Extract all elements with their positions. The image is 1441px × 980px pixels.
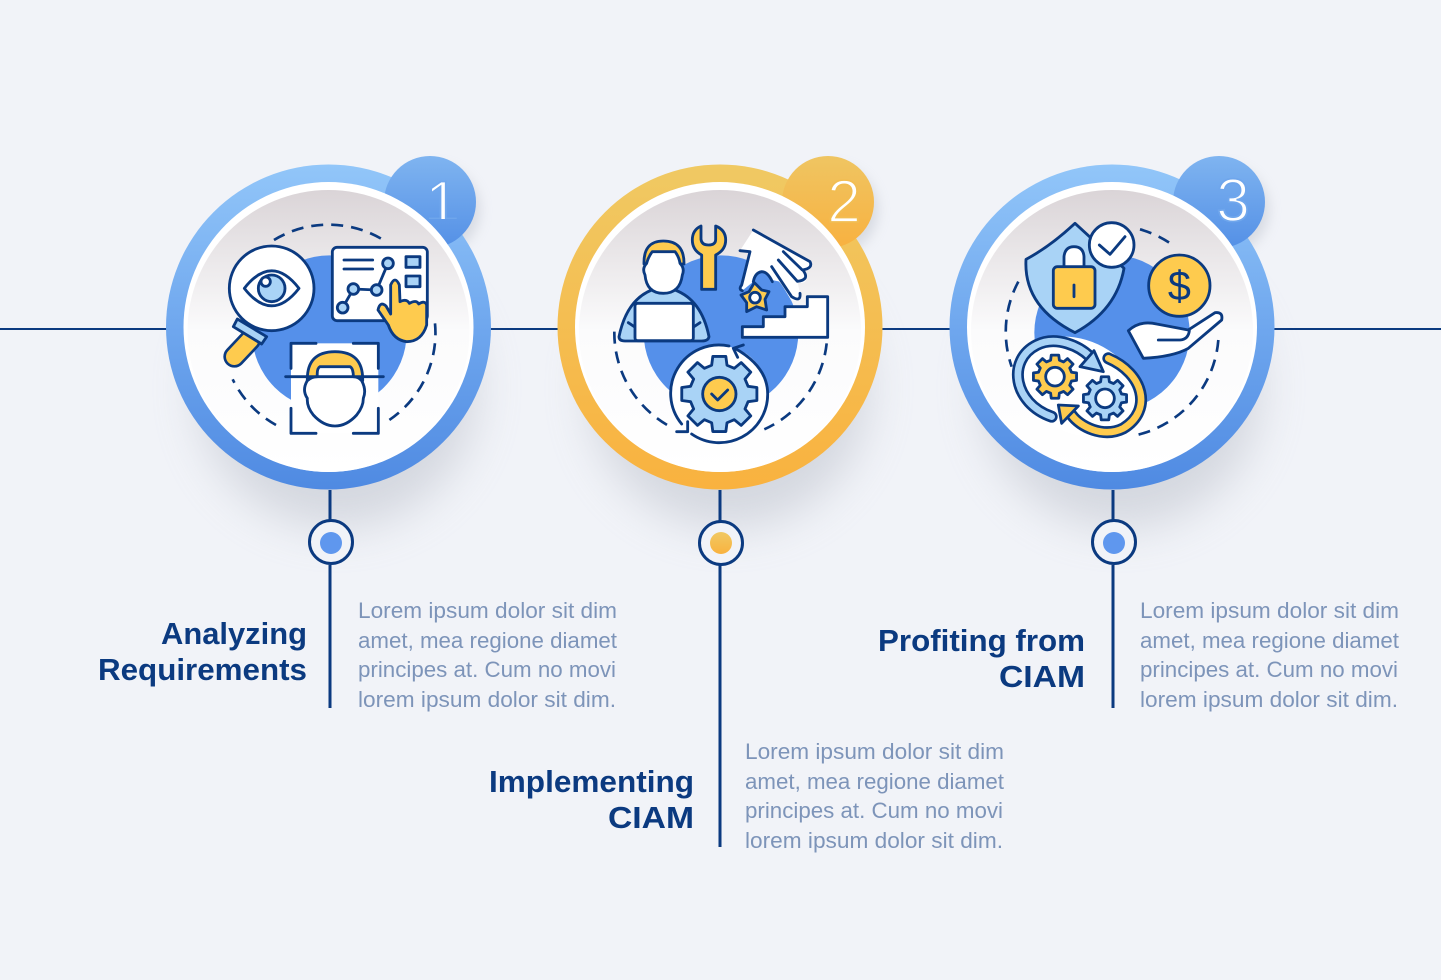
step 3 stem and node <box>1092 490 1136 708</box>
panel: step 2 circle <box>558 156 882 528</box>
panel: step 1 circle <box>166 156 491 528</box>
text block: step 2 description <box>745 739 1004 853</box>
timeline connector <box>0 328 1441 330</box>
text block: step 1 description: principes at. Cum no movi <box>358 657 616 682</box>
text block: step 3 description: principes at. Cum no movi <box>1140 657 1398 682</box>
text block: step 1 description: Lorem ipsum dolor sit dim <box>358 598 617 623</box>
heading: Profiting from CIAM: Profiting from <box>878 623 1085 658</box>
dollar sign: $ <box>1168 263 1191 309</box>
heading: Profiting from CIAM: CIAM <box>999 659 1085 694</box>
text block: step 2 description: lorem ipsum dolor sit dim. <box>745 828 1003 853</box>
heading: Implementing CIAM: CIAM <box>608 800 694 835</box>
text block: step 1 description: amet, mea regione diamet <box>358 628 617 653</box>
number 3: 3 <box>1216 167 1250 234</box>
icon: profiting <box>1001 223 1222 456</box>
heading: Implementing CIAM <box>489 764 694 835</box>
text block: step 1 description <box>358 598 617 712</box>
text block: step 3 description: Lorem ipsum dolor sit dim <box>1140 598 1399 623</box>
text block: step 2 description: principes at. Cum no movi <box>745 798 1003 823</box>
heading: Implementing CIAM: Implementing <box>489 764 694 799</box>
text block: step 3 description: lorem ipsum dolor sit dim. <box>1140 687 1398 712</box>
step 2 stem and node <box>700 490 742 847</box>
number 2: 2 <box>827 168 861 235</box>
step 1 stem and node <box>310 490 352 708</box>
text block: step 2 description: amet, mea regione diamet <box>745 769 1004 794</box>
text block: step 3 description: amet, mea regione diamet <box>1140 628 1399 653</box>
text block: step 1 description: lorem ipsum dolor sit dim. <box>358 687 616 712</box>
heading: Profiting from CIAM <box>878 623 1085 694</box>
heading: Analyzing Requirements: Requirements <box>98 652 307 687</box>
text block: step 3 description <box>1140 598 1399 712</box>
icon: analyzing requirements <box>229 225 435 433</box>
icon: implementing <box>614 226 828 443</box>
heading: Analyzing Requirements <box>98 616 307 687</box>
number 1: 1 <box>425 169 459 236</box>
heading: Analyzing Requirements: Analyzing <box>161 616 307 651</box>
panel: step 3 circle <box>950 156 1274 528</box>
text block: step 2 description: Lorem ipsum dolor sit dim <box>745 739 1004 764</box>
